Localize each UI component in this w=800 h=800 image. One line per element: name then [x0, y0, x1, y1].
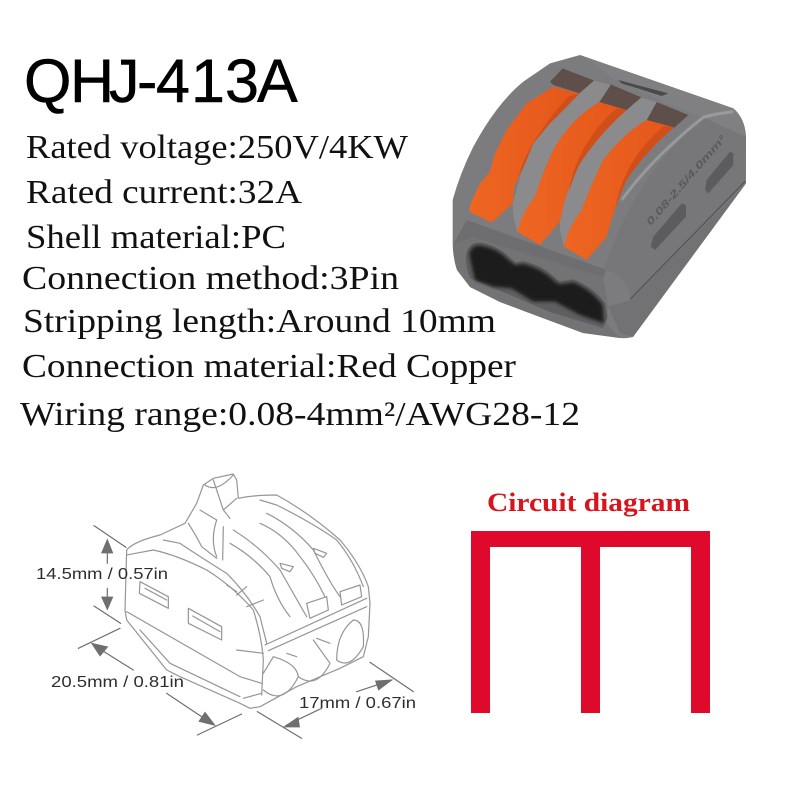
shoulder highlight	[622, 112, 733, 200]
spec: rated voltage: Rated voltage:250V/4KW	[26, 129, 409, 166]
front face	[453, 237, 620, 338]
spec: rated current: Rated current:32A	[26, 174, 302, 211]
connector body	[453, 55, 746, 338]
spec: shell material: Shell material:PC	[26, 219, 286, 256]
drawing: body outline	[125, 474, 370, 708]
orange levers	[469, 87, 579, 223]
specification list	[20, 129, 580, 433]
title: QHJ-413A	[24, 47, 298, 115]
embossed marking: 0.08-2.5/4.0mm²	[645, 133, 729, 228]
dimension label: length: 20.5mm / 0.81in	[51, 674, 184, 691]
side panel seam	[630, 181, 745, 299]
dimension drawing	[78, 474, 413, 738]
spec: connection material: Connection material:Red Copper	[22, 348, 517, 385]
spec: wiring range: Wiring range:0.08-4mm²/AWG28-12	[20, 396, 580, 433]
arrow: length	[78, 628, 242, 735]
arrow: width	[257, 662, 413, 738]
arrow: height	[94, 526, 126, 623]
front wire openings	[466, 243, 608, 328]
drawing: side slots	[139, 582, 168, 608]
side windows	[651, 203, 686, 250]
spec: stripping length: Stripping length:Around 10mm	[23, 303, 496, 340]
spec: connection method: Connection method:3Pin	[22, 260, 399, 297]
grey ridges between levers	[513, 81, 611, 232]
dimension label: height: 14.5mm / 0.57in	[36, 566, 168, 583]
circuit diagram	[471, 531, 710, 713]
product photo: connector	[453, 55, 746, 338]
top recesses	[550, 68, 594, 93]
dimension label: width: 17mm / 0.67in	[299, 695, 416, 712]
circuit diagram heading: Circuit diagram	[487, 488, 690, 517]
